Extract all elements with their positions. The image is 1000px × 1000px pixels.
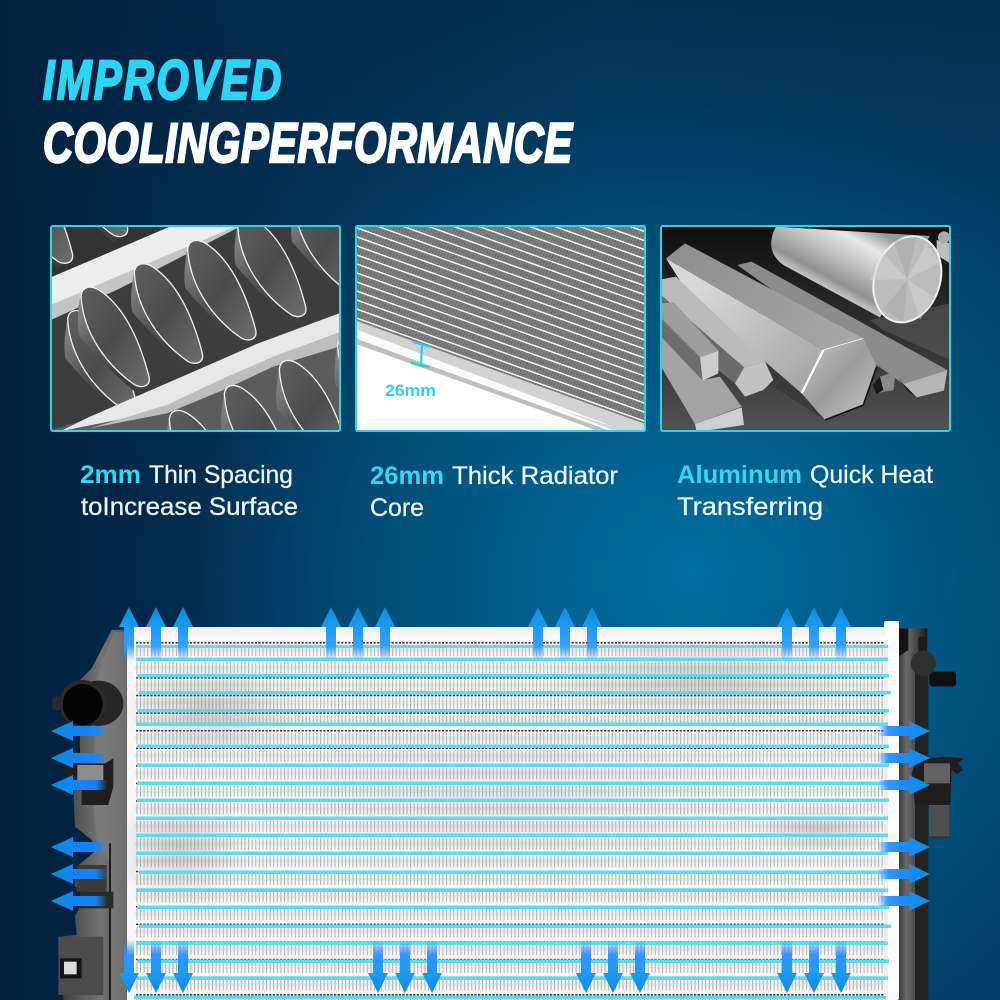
- dimension marker: 26mm: 26mm: [385, 382, 436, 400]
- white frame and aluminium core: [110, 621, 899, 1000]
- caption: thin spacing: toIncrease Surface: [81, 493, 298, 521]
- panel: aluminum bars photo: [660, 225, 951, 432]
- caption: aluminum heat transfer: [677, 461, 933, 521]
- caption: thin spacing: [80, 461, 298, 521]
- caption: thin spacing: Thin Spacing: [149, 461, 293, 489]
- caption: aluminum heat transfer: Aluminum: [677, 461, 802, 489]
- caption: thick radiator core: Core: [370, 494, 424, 522]
- caption: thick radiator core: [370, 462, 618, 522]
- panel: thin spacing fins photo: [50, 225, 341, 432]
- caption: aluminum heat transfer: Quick Heat: [810, 461, 933, 489]
- caption: thick radiator core: 26mm: [370, 462, 444, 490]
- caption: aluminum heat transfer: Transferring: [677, 493, 823, 521]
- right plastic tank with cap: [897, 628, 963, 1000]
- radiator: [51, 607, 963, 1000]
- left plastic tank with hose inlet: [53, 629, 130, 1000]
- title line: improved: IMPROVED: [43, 49, 281, 112]
- airflow arrows: down: [119, 940, 851, 993]
- title line: cooling performance: COOLINGPERFORMANCE: [43, 112, 574, 175]
- cyan tube lines: [134, 645, 891, 999]
- airflow arrows: up: [119, 607, 851, 660]
- caption: thick radiator core: Thick Radiator: [452, 462, 618, 490]
- airflow arrows: left: [51, 721, 107, 911]
- title: [43, 49, 574, 175]
- caption: thin spacing: 2mm: [80, 461, 141, 489]
- dimension marker: 26mm: [385, 342, 436, 400]
- radiator cap: [911, 651, 936, 676]
- panel: 26mm radiator core close-up: [355, 225, 646, 433]
- airflow arrows: right: [878, 721, 930, 911]
- hose inlet: [59, 680, 123, 728]
